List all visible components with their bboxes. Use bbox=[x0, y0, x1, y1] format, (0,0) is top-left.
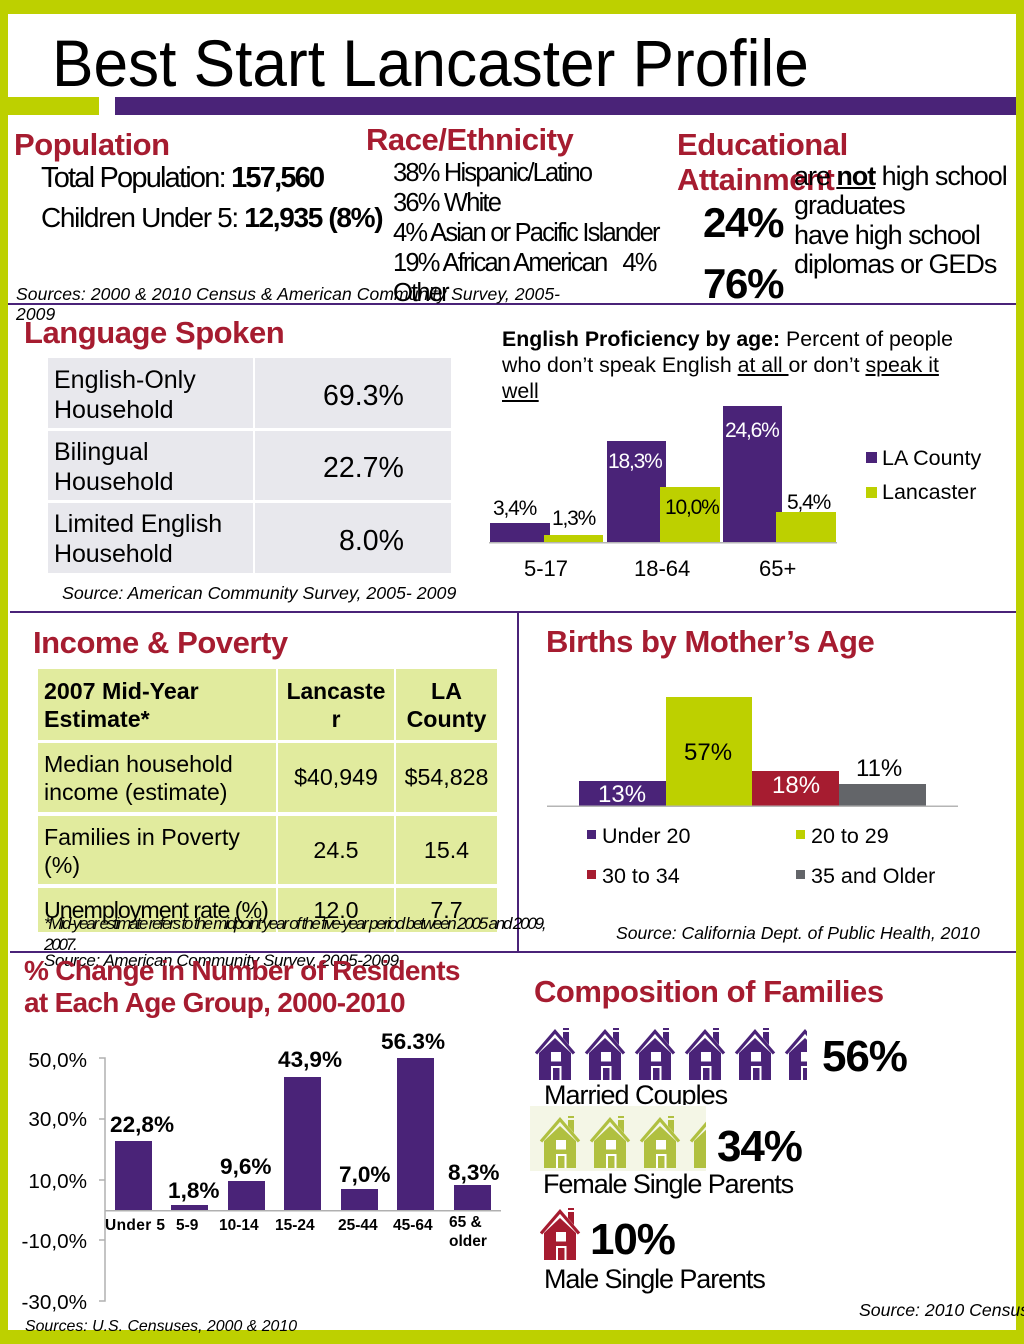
list: race percentages: 36% White bbox=[393, 189, 500, 217]
bar chart: percent change by age group: 50,0% bbox=[28, 1049, 87, 1072]
table: income and poverty: income (estimate) bbox=[44, 779, 227, 805]
heading: change in residents: % Change in Number of Residents bbox=[24, 955, 460, 986]
heading: change in residents: at Each Age Group, 2000-2010 bbox=[24, 987, 405, 1018]
stat: 76 percent: 76% bbox=[703, 260, 783, 307]
title: Best Start Lancaster Profile bbox=[52, 26, 809, 100]
legend: 35 and Older bbox=[811, 864, 935, 888]
table: income and poverty: LA bbox=[431, 678, 462, 704]
bar chart: percent change by age group: -30,0% bbox=[21, 1291, 87, 1314]
bar chart: births by mother's age: 18% bbox=[772, 772, 820, 799]
bar chart: births by mother's age: 13% bbox=[598, 781, 646, 808]
legend: 30 to 34 bbox=[602, 864, 680, 888]
source: residents: Sources: U.S. Censuses, 2000 & 2010 bbox=[25, 1318, 297, 1335]
bar chart: percent change by age group: 56.3% bbox=[381, 1029, 445, 1054]
table: language spoken: 69.3% bbox=[323, 380, 404, 412]
table: income and poverty: r bbox=[332, 706, 340, 732]
text: attainment descriptions: diplomas or GEDs bbox=[794, 249, 996, 279]
heading: change in residents bbox=[24, 955, 460, 1018]
table: income and poverty: Estimate* bbox=[44, 706, 150, 732]
bar chart: percent change by age group: 10-14 bbox=[219, 1217, 259, 1234]
text: attainment descriptions: graduates bbox=[794, 190, 905, 220]
table: income and poverty: Families in Poverty bbox=[44, 824, 240, 850]
table: income and poverty: $54,828 bbox=[405, 764, 488, 790]
bar chart: births by mother's age: 57% bbox=[684, 739, 732, 766]
table: income and poverty: Unemployment rate (%) bbox=[44, 897, 268, 923]
list: race percentages: Other bbox=[393, 279, 448, 307]
title accent bar: purple bbox=[115, 97, 1016, 115]
list: race percentages: 38% Hispanic/Latino bbox=[393, 159, 591, 187]
table: income and poverty: 15.4 bbox=[424, 837, 469, 863]
heading: educational attainment: Attainment bbox=[677, 162, 834, 197]
bar chart: percent change by age group: 15-24 bbox=[275, 1217, 315, 1234]
bar chart: English proficiency by age: 18,3% bbox=[608, 450, 662, 473]
label: female single parents: Female Single Parents bbox=[543, 1169, 793, 1199]
text: English proficiency heading: well bbox=[502, 379, 539, 403]
panel: educational attainment bbox=[677, 127, 1007, 307]
label: male single parents: Male Single Parents bbox=[544, 1264, 765, 1294]
table: income and poverty: (%) bbox=[44, 852, 80, 878]
legend: Under 20 bbox=[602, 824, 690, 848]
table: language spoken: Household bbox=[54, 540, 173, 568]
icon: male single parent house bbox=[540, 1208, 580, 1260]
stat: 34 percent: 34% bbox=[717, 1122, 802, 1171]
table: language spoken: Household bbox=[54, 468, 174, 496]
legend: LA County bbox=[882, 446, 981, 470]
legend bbox=[866, 446, 981, 504]
legend: 20 to 29 bbox=[811, 824, 889, 848]
text: attainment descriptions: have high school bbox=[794, 220, 980, 250]
source: language: Source: American Community Survey, 2005- 2009 bbox=[62, 583, 456, 603]
text: children under 5: Children Under 5: 12,935 (8%) bbox=[41, 202, 382, 233]
source: population bbox=[16, 284, 560, 324]
table: income and poverty: County bbox=[407, 706, 486, 732]
table: income and poverty: 24.5 bbox=[313, 837, 359, 863]
table: income and poverty: $40,949 bbox=[294, 764, 378, 790]
bar chart: English proficiency by age: 10,0% bbox=[665, 496, 719, 519]
heading: race/ethnicity: Race/Ethnicity bbox=[366, 122, 573, 157]
bar chart: percent change by age group: 9,6% bbox=[220, 1154, 272, 1179]
bar chart: percent change by age group: 5-9 bbox=[176, 1217, 199, 1234]
list: race percentages: 4% Asian or Pacific Islander bbox=[393, 219, 659, 247]
bar chart: English proficiency by age: 5-17 bbox=[524, 556, 568, 581]
icons: married couples houses bbox=[535, 1028, 807, 1080]
table: income and poverty bbox=[38, 669, 497, 932]
list: race percentages: 19% African American 4% bbox=[393, 249, 656, 277]
text: English proficiency heading bbox=[502, 327, 953, 403]
bar chart: births by mother's age bbox=[547, 697, 958, 888]
table: income and poverty: 7.7 bbox=[430, 897, 463, 923]
table: language spoken: Bilingual bbox=[54, 438, 149, 466]
bar chart: percent change by age group: 10,0% bbox=[28, 1170, 87, 1193]
table: income and poverty: Lancaste bbox=[287, 678, 385, 704]
heading: educational attainment bbox=[677, 127, 848, 197]
title accent bar: lime bbox=[8, 97, 99, 115]
bar chart: percent change by age group: 30,0% bbox=[28, 1108, 87, 1131]
bar chart: percent change by age group: Under 5 bbox=[105, 1217, 165, 1234]
bar chart: percent change by age group: 1,8% bbox=[168, 1178, 220, 1203]
table: language spoken bbox=[48, 358, 451, 573]
bar chart: percent change by age group: 22,8% bbox=[110, 1112, 174, 1137]
source: births: Source: California Dept. of Public Health, 2010 bbox=[616, 923, 980, 943]
heading: educational attainment: Educational bbox=[677, 127, 848, 162]
table: income and poverty: Median household bbox=[44, 751, 233, 777]
legend bbox=[587, 824, 935, 888]
bar chart: English proficiency by age: 65+ bbox=[759, 556, 796, 581]
bar chart: percent change by age group: 7,0% bbox=[339, 1162, 390, 1187]
bar chart: percent change by age group: 43,9% bbox=[278, 1047, 342, 1072]
bar chart: percent change by age group: 45-64 bbox=[393, 1217, 433, 1234]
text: total population: Total Population: 157,560 bbox=[41, 162, 323, 194]
source: income: Source: American Community Survey, 2005-2009 bbox=[44, 951, 399, 970]
heading: language spoken: Language Spoken bbox=[24, 315, 284, 350]
bar chart: English proficiency by age: 24,6% bbox=[725, 419, 779, 442]
panel: population bbox=[14, 127, 560, 324]
table: language spoken: 8.0% bbox=[339, 525, 404, 557]
table: income and poverty: 12.0 bbox=[313, 897, 359, 923]
stat: 10 percent: 10% bbox=[590, 1215, 675, 1264]
bar chart: percent change by age group: -10,0% bbox=[21, 1230, 87, 1253]
footnote: income and poverty bbox=[44, 914, 545, 954]
panel: race and ethnicity bbox=[366, 122, 660, 307]
bar chart: English proficiency by age bbox=[489, 406, 982, 581]
source: population: Sources: 2000 & 2010 Census & American Community Survey, 2005- bbox=[16, 284, 560, 304]
bar chart: percent change by age group: 8,3% bbox=[448, 1160, 500, 1185]
bar chart: English proficiency by age: 1,3% bbox=[552, 507, 596, 530]
heading: income and poverty: Income & Poverty bbox=[33, 625, 288, 660]
heading: population: Population bbox=[14, 127, 170, 162]
text: attainment descriptions bbox=[794, 161, 1007, 279]
bar chart: births by mother's age: 11% bbox=[856, 755, 902, 782]
stat: 56 percent: 56% bbox=[822, 1032, 907, 1081]
footnote: income and poverty: 2007. bbox=[44, 935, 76, 954]
bar chart: percent change by age group: 65 & bbox=[449, 1214, 482, 1231]
table: language spoken: Household bbox=[54, 396, 174, 424]
list: race percentages bbox=[393, 159, 660, 307]
bar chart: percent change by age group: older bbox=[449, 1233, 487, 1250]
text: attainment descriptions: are not high school bbox=[794, 161, 1007, 191]
heading: composition of families: Composition of Families bbox=[534, 974, 884, 1009]
table: income and poverty: 2007 Mid-Year bbox=[44, 678, 199, 704]
legend: Lancaster bbox=[882, 480, 976, 504]
bar chart: percent change by age group: 25-44 bbox=[338, 1217, 378, 1234]
bar chart: English proficiency by age: 18-64 bbox=[634, 556, 690, 581]
bar chart: English proficiency by age: 3,4% bbox=[493, 497, 537, 520]
table: language spoken: Limited English bbox=[54, 510, 222, 538]
source: population: 2009 bbox=[16, 304, 55, 324]
text: English proficiency heading: English Proficiency by age: Percent of people bbox=[502, 327, 953, 351]
table: language spoken: English-Only bbox=[54, 366, 196, 394]
footnote: income and poverty: *Mid-year estimate refers to the midpoint year of the five-year period between 2005 and 2009, bbox=[44, 914, 544, 933]
heading: births by mother's age: Births by Mother’s Age bbox=[546, 624, 874, 659]
bar chart: percent change by age group bbox=[21, 1029, 501, 1314]
table: language spoken: 22.7% bbox=[323, 452, 404, 484]
text: English proficiency heading: who don’t speak English at all or don’t speak it bbox=[502, 353, 939, 377]
stat: 24 percent: 24% bbox=[703, 199, 783, 246]
icons: female single parents houses bbox=[530, 1106, 706, 1171]
bar chart: English proficiency by age: 5,4% bbox=[787, 491, 831, 514]
